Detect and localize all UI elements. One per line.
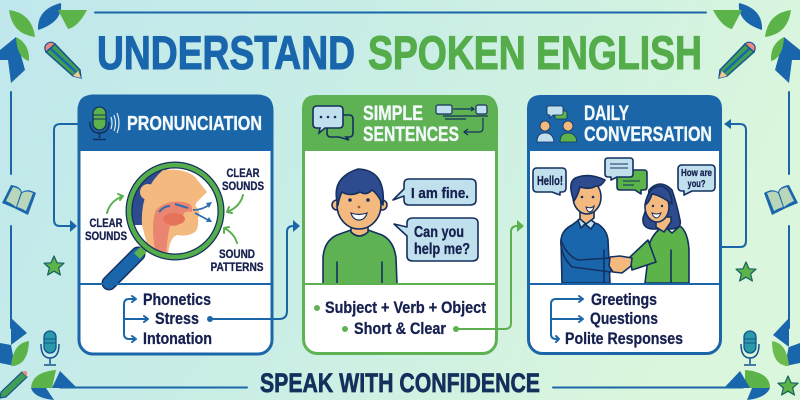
- icon: book right: [764, 185, 798, 215]
- icon: star right: [736, 262, 756, 281]
- list: conversation topics: [551, 290, 683, 348]
- list: sentence rules: [314, 298, 486, 338]
- side rules: [11, 92, 789, 328]
- arrow: stress to simple sentences: [207, 220, 300, 322]
- label: clear sounds left: [85, 216, 127, 243]
- icon: microphone right: [741, 331, 759, 365]
- heading: pronunciation: PRONUNCIATION: [127, 113, 262, 135]
- decoration: top-right leaves: [713, 3, 800, 83]
- decoration: bottom-right leaves: [724, 318, 800, 400]
- icon: chat bubbles green and blue: [605, 158, 647, 194]
- heading: daily conversation: CONVERSATION: [584, 123, 712, 146]
- decoration: bottom-left leaves: [0, 318, 77, 400]
- panel header: pronunciation: [78, 95, 273, 151]
- panel: daily conversation: [527, 95, 722, 354]
- hands: [609, 256, 632, 273]
- top rule: [95, 12, 706, 14]
- icon: star left: [44, 256, 64, 275]
- divider: pronunciation: [80, 283, 271, 285]
- speech bubble: how are you: How are: [681, 167, 712, 179]
- arrow: daily conversation return: [722, 119, 746, 247]
- illustration: magnifier over mouth: [109, 165, 221, 283]
- speech bubble: I am fine: [393, 179, 476, 205]
- icon: microphone with sound waves: [90, 107, 119, 140]
- green callout arrows: [107, 194, 243, 243]
- label: clear sounds left: SOUNDS: [85, 229, 127, 243]
- footer tagline: SPEAK WITH CONFIDENCE: [260, 368, 540, 398]
- label: sound patterns: PATTERNS: [210, 260, 264, 274]
- label: clear sounds right: SOUNDS: [222, 179, 264, 193]
- divider: daily conversation: [528, 283, 721, 285]
- man: [561, 176, 611, 283]
- list: sentence rules: Subject + Verb + Object: [325, 298, 486, 317]
- list: pronunciation topics: Intonation: [143, 329, 212, 348]
- speech bubble: I am fine: I am fine.: [411, 185, 469, 202]
- list: pronunciation topics: Stress: [155, 309, 199, 328]
- list: pronunciation topics: Phonetics: [143, 290, 211, 309]
- list: sentence rules: Short & Clear: [354, 319, 446, 338]
- icon: pencil right: [719, 42, 755, 78]
- list: pronunciation topics: [124, 290, 212, 348]
- icon: microphone left: [41, 331, 59, 365]
- icon: sentence flow diagram: [436, 105, 488, 135]
- speech bubble: can you help me: Can you: [414, 224, 464, 241]
- icon: pencil bottom-left: [0, 371, 27, 398]
- illustration: handshake: [561, 176, 689, 283]
- panel: simple sentences: [302, 95, 497, 354]
- heading: simple sentences: [363, 102, 459, 146]
- footer rules: [60, 386, 743, 388]
- list: conversation topics: Greetings: [591, 290, 657, 309]
- speech bubble: hello: Hello!: [537, 174, 563, 188]
- icon: star bottom right: [778, 376, 798, 395]
- speech bubble: how are you: [678, 165, 715, 195]
- icon: two people talking: [537, 106, 577, 142]
- title: UNDERSTAND: [97, 26, 355, 79]
- heading: simple sentences: SENTENCES: [363, 123, 459, 146]
- speech bubble: hello: [533, 168, 566, 195]
- woman: [630, 184, 689, 283]
- icon: book left: [2, 185, 36, 215]
- heading: daily conversation: [584, 102, 712, 146]
- illustration: smiling man: [323, 169, 397, 284]
- heading: daily conversation: DAILY: [584, 102, 629, 125]
- title: [97, 26, 702, 79]
- arrow: pronunciation loop: [54, 124, 78, 232]
- speech bubble: can you help me: [394, 218, 478, 261]
- label: clear sounds right: [222, 166, 264, 193]
- speech bubble: how are you: you?: [688, 178, 706, 190]
- divider: simple sentences: [304, 283, 496, 285]
- panel: pronunciation: [78, 95, 273, 354]
- icon: chat bubbles: [313, 106, 353, 140]
- label: sound patterns: SOUND: [219, 247, 255, 261]
- list: conversation topics: Questions: [590, 309, 658, 328]
- label: clear sounds left: CLEAR: [90, 216, 123, 230]
- panel header: simple sentences: [302, 95, 497, 151]
- icon: pencil left: [45, 42, 81, 78]
- heading: simple sentences: SIMPLE: [363, 102, 423, 125]
- arrow: short and clear to daily conversation: [453, 220, 524, 332]
- decoration: top-left leaves: [0, 3, 87, 83]
- label: sound patterns: [210, 247, 264, 274]
- title: SPOKEN ENGLISH: [368, 26, 702, 79]
- speech bubble: can you help me: help me?: [414, 241, 470, 258]
- panel header: daily conversation: [527, 95, 722, 151]
- list: conversation topics: Polite Responses: [565, 329, 683, 348]
- label: clear sounds right: CLEAR: [226, 166, 260, 180]
